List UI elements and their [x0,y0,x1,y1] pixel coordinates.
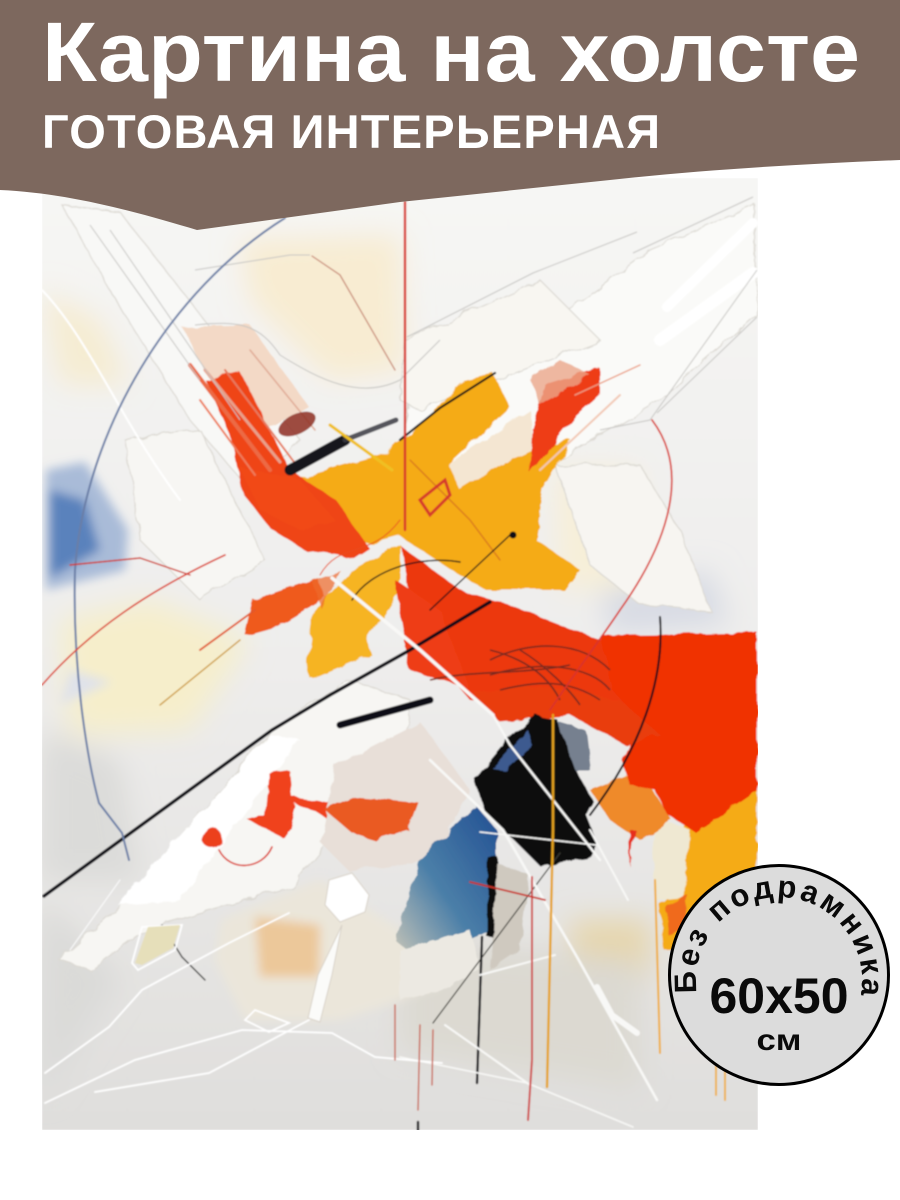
white ridge lines [42,223,753,1103]
blurred lower-middle stroke [227,885,404,1012]
black brush streaks and lines [44,373,661,1130]
badge size: 60x50 [710,968,848,1024]
upper-left white stroke [62,205,300,490]
white impasto strokes [59,205,757,970]
right white patch [555,465,712,612]
big red block [600,632,757,832]
badge curved text: Без подрамника [674,880,878,996]
white paint blob [308,873,369,1022]
white thin lines [332,578,657,1127]
lower red blob [245,770,329,837]
grey ridge lines [90,197,757,430]
dark red accent [278,410,316,438]
red dabs and streaks [160,350,640,705]
pale colour washes [42,235,730,1100]
badge unit: см [756,1024,802,1057]
left speckled white [125,430,265,600]
dark tangled strokes in the red band [430,646,610,705]
central red band [400,545,640,720]
blue wash at left edge [46,462,128,705]
lower-left main white stroke [59,680,410,970]
subtitle: ГОТОВАЯ ИНТЕРЬЕРНАЯ [42,105,660,158]
header banner [0,0,900,230]
beige patch [135,925,180,965]
orange under red [590,770,672,840]
upper-left red stroke [205,372,369,558]
painting: abstract canvas [42,178,758,1130]
black and blue paint [395,715,596,1000]
title: Картина на холсте [42,5,860,99]
lower orange patch [325,797,419,840]
size badge [668,864,890,1086]
left orange stroke [246,579,325,636]
upper-right white stroke [400,205,757,470]
yellow paint [296,373,757,950]
top right red patch [530,368,600,473]
thin coloured lines [42,202,725,1120]
red-orange paint masses [202,360,757,868]
speckled grey patch [320,722,470,872]
pink wash [182,325,309,430]
